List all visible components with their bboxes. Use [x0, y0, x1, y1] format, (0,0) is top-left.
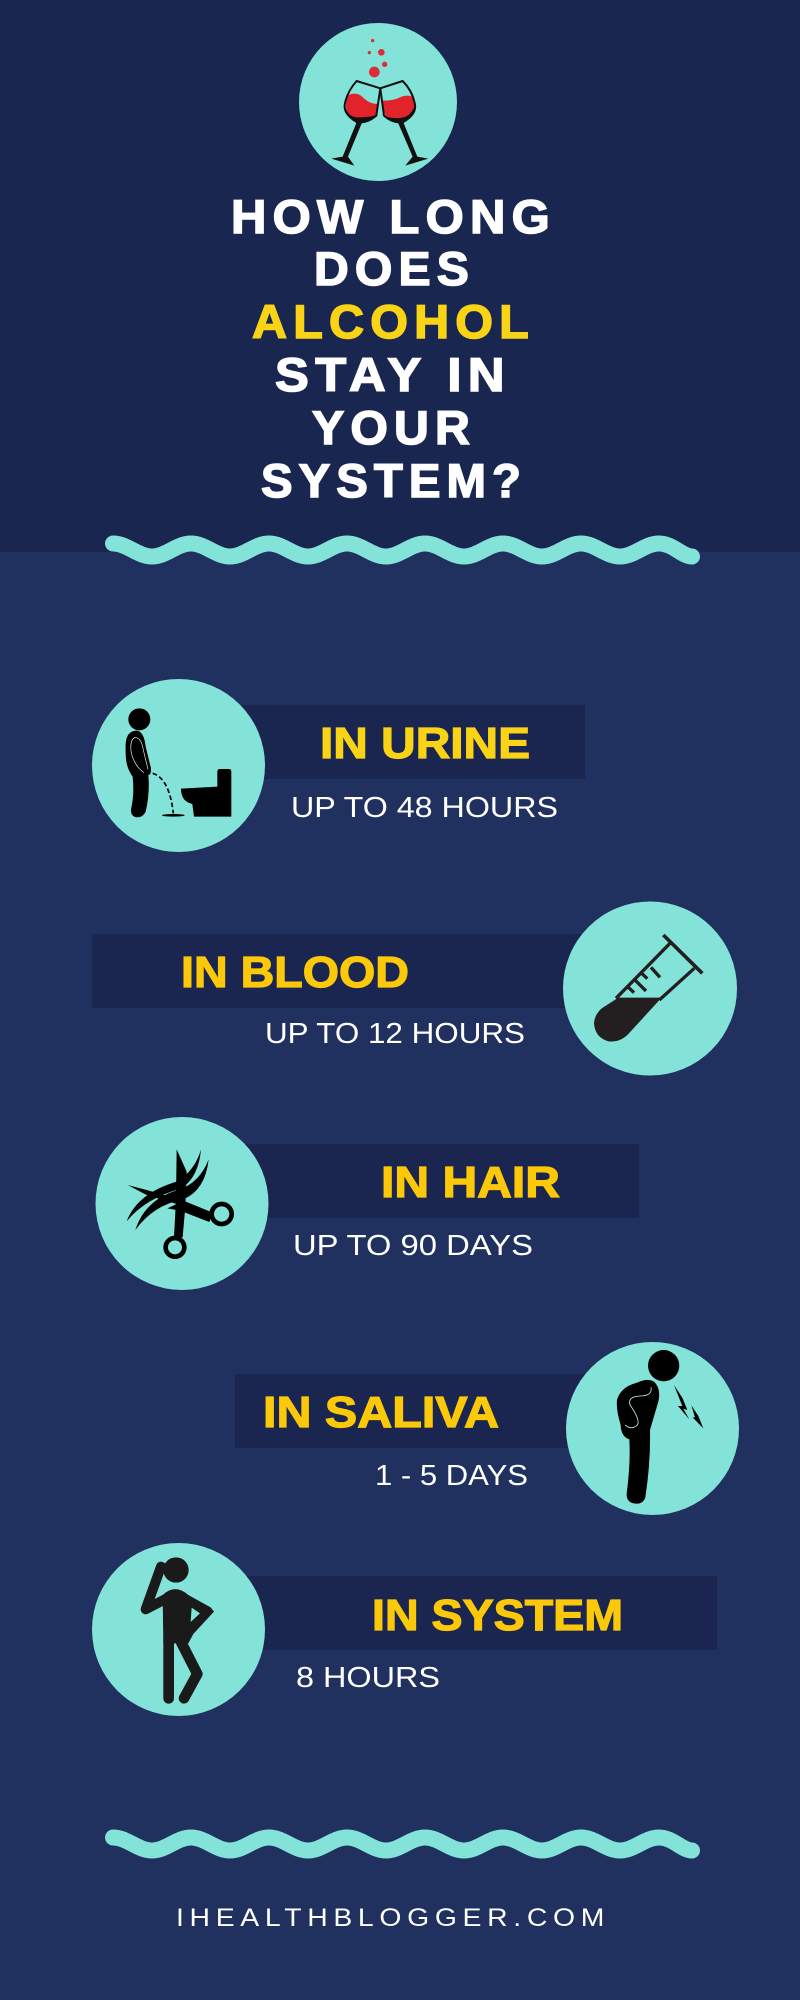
heading bar: in hair: [182, 1144, 639, 1218]
panel: in blood: [92, 902, 737, 1076]
title: SYSTEM?: [261, 454, 527, 507]
panel: header background: [0, 0, 800, 552]
text: up to 12 hours: UP TO 12 HOURS: [265, 1018, 525, 1050]
title: YOUR: [312, 401, 476, 454]
panel: in saliva: [235, 1342, 739, 1515]
title: DOES: [314, 242, 475, 295]
text: 8 hours: 8 HOURS: [296, 1662, 440, 1694]
heading bar: in saliva: [235, 1374, 595, 1448]
heading: in blood: IN BLOOD: [181, 948, 409, 997]
heading: in urine: IN URINE: [320, 719, 530, 768]
heading: in system: IN SYSTEM: [372, 1591, 623, 1640]
footer: website: IHEALTHBLOGGER.COM: [176, 1904, 610, 1932]
title: ALCOHOL: [252, 295, 535, 348]
title: [231, 190, 556, 507]
icon: person spitting: [566, 1342, 739, 1515]
icon: person urinating: [92, 679, 265, 852]
text: up to 90 days: UP TO 90 DAYS: [293, 1230, 533, 1262]
heading bar: in blood: [92, 934, 592, 1008]
icon: person with headache: [92, 1543, 265, 1716]
icon: test tube: [563, 902, 737, 1076]
title: HOW LONG: [231, 190, 556, 243]
wave divider top: [113, 544, 692, 556]
heading: in saliva: IN SALIVA: [263, 1388, 499, 1437]
heading bar: in urine: [178, 705, 585, 779]
text: 1 - 5 days: 1 - 5 DAYS: [375, 1460, 528, 1492]
text: up to 48 hours: UP TO 48 HOURS: [291, 792, 558, 824]
heading: in hair: IN HAIR: [381, 1158, 560, 1207]
panel: in urine: [92, 679, 585, 852]
title: STAY IN: [275, 348, 511, 401]
panel: in hair: [96, 1117, 639, 1290]
icon: clinking wine glasses: [299, 23, 457, 181]
panel: in system: [92, 1543, 717, 1716]
wave divider bottom: [113, 1838, 692, 1850]
icon: scissors cutting hair: [96, 1117, 268, 1290]
heading bar: in system: [178, 1576, 717, 1650]
